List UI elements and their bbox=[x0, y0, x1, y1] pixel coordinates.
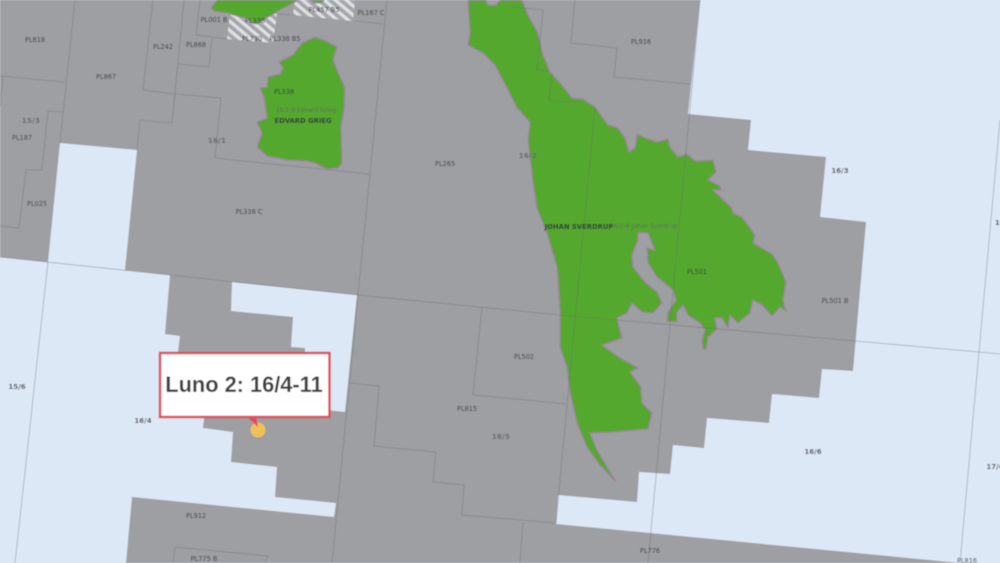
licence labels: PL776 bbox=[640, 547, 660, 555]
block number labels: 16/3 bbox=[831, 167, 849, 175]
licence labels: PL867 bbox=[96, 73, 116, 81]
callout: Luno 2: Luno 2: 16/4-11 bbox=[165, 372, 323, 397]
callout: Luno 2 bbox=[160, 353, 330, 417]
licence labels: PL242 bbox=[153, 43, 173, 51]
block number labels bbox=[8, 117, 1000, 471]
licence labels: PL815 bbox=[457, 405, 477, 413]
field: Johan Sverdrup bbox=[468, 0, 786, 482]
block number labels: 16/6 bbox=[804, 448, 822, 456]
field labels bbox=[274, 107, 678, 231]
licence labels: PL338 bbox=[245, 17, 265, 25]
licence labels: PL265 bbox=[435, 160, 455, 168]
licence labels: PL338 C bbox=[236, 208, 263, 216]
licence labels: PL818 bbox=[25, 36, 45, 44]
block number labels: 15/3 bbox=[22, 117, 40, 125]
field labels: JOHAN SVERDRUP bbox=[544, 223, 613, 231]
block number labels: 16/4 bbox=[134, 417, 152, 425]
licence labels: PL730 bbox=[242, 35, 262, 43]
licence labels: PL912 bbox=[186, 512, 206, 520]
block number labels: 15/6 bbox=[8, 383, 26, 391]
licence labels: PL338 bbox=[274, 88, 294, 96]
licence labels: PL025 bbox=[27, 200, 47, 208]
field: Edvard Grieg bbox=[257, 37, 345, 169]
block number labels: 16/1 bbox=[208, 137, 226, 145]
well marker bbox=[250, 422, 266, 438]
block number labels: 16/2 bbox=[519, 152, 537, 160]
open area notch bbox=[231, 282, 357, 412]
licence labels: PL502 bbox=[514, 353, 534, 361]
licence labels: PL001 B bbox=[201, 16, 228, 24]
licence labels: PL775 B bbox=[191, 555, 218, 563]
licence labels: PL167 C bbox=[358, 9, 385, 17]
field labels: EDVARD GRIEG bbox=[274, 117, 332, 125]
licence labels: PL187 bbox=[12, 134, 32, 142]
field labels: 16/2-6 Johan Sverdrup bbox=[610, 223, 678, 230]
block number labels: 16/5 bbox=[492, 433, 510, 441]
hatched licence areas bbox=[227, 0, 355, 43]
field labels: 16/1-8 Edvard Grieg bbox=[276, 107, 336, 114]
field: top green area bbox=[211, 0, 324, 24]
licence labels: PL338 B5 bbox=[269, 35, 301, 43]
licence labels: PL501 B bbox=[822, 297, 849, 305]
licence labels: PL868 bbox=[186, 41, 206, 49]
callout pointer bbox=[246, 416, 258, 427]
licence labels: PL501 bbox=[687, 268, 707, 276]
licence labels: PL457 B5 bbox=[308, 6, 340, 14]
licence labels: PL916 bbox=[631, 38, 651, 46]
